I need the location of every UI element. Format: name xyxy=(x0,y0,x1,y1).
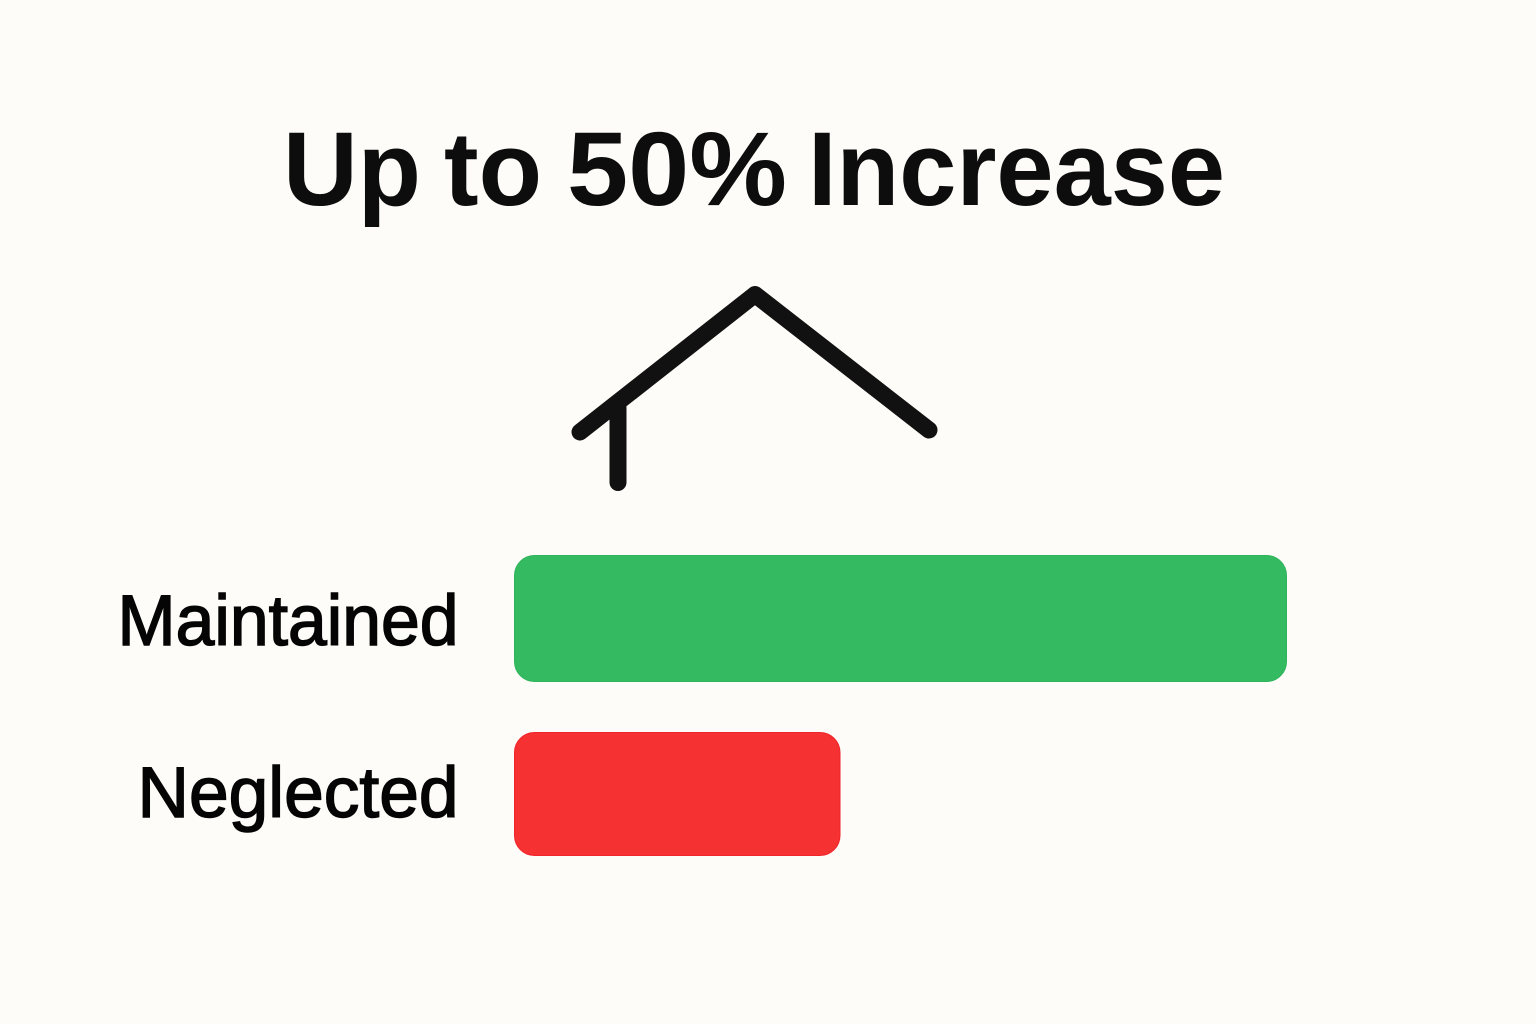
title: Up xyxy=(283,111,421,228)
title: 50% xyxy=(567,111,787,228)
bar: neglected xyxy=(514,732,840,856)
title: to xyxy=(444,111,542,228)
bar: maintained xyxy=(514,556,1286,682)
icon: house roof xyxy=(580,294,929,482)
label: neglected: Neglected xyxy=(138,754,458,833)
title: Increase xyxy=(808,111,1225,228)
label: maintained: Maintained xyxy=(118,582,458,661)
title xyxy=(283,111,1225,228)
